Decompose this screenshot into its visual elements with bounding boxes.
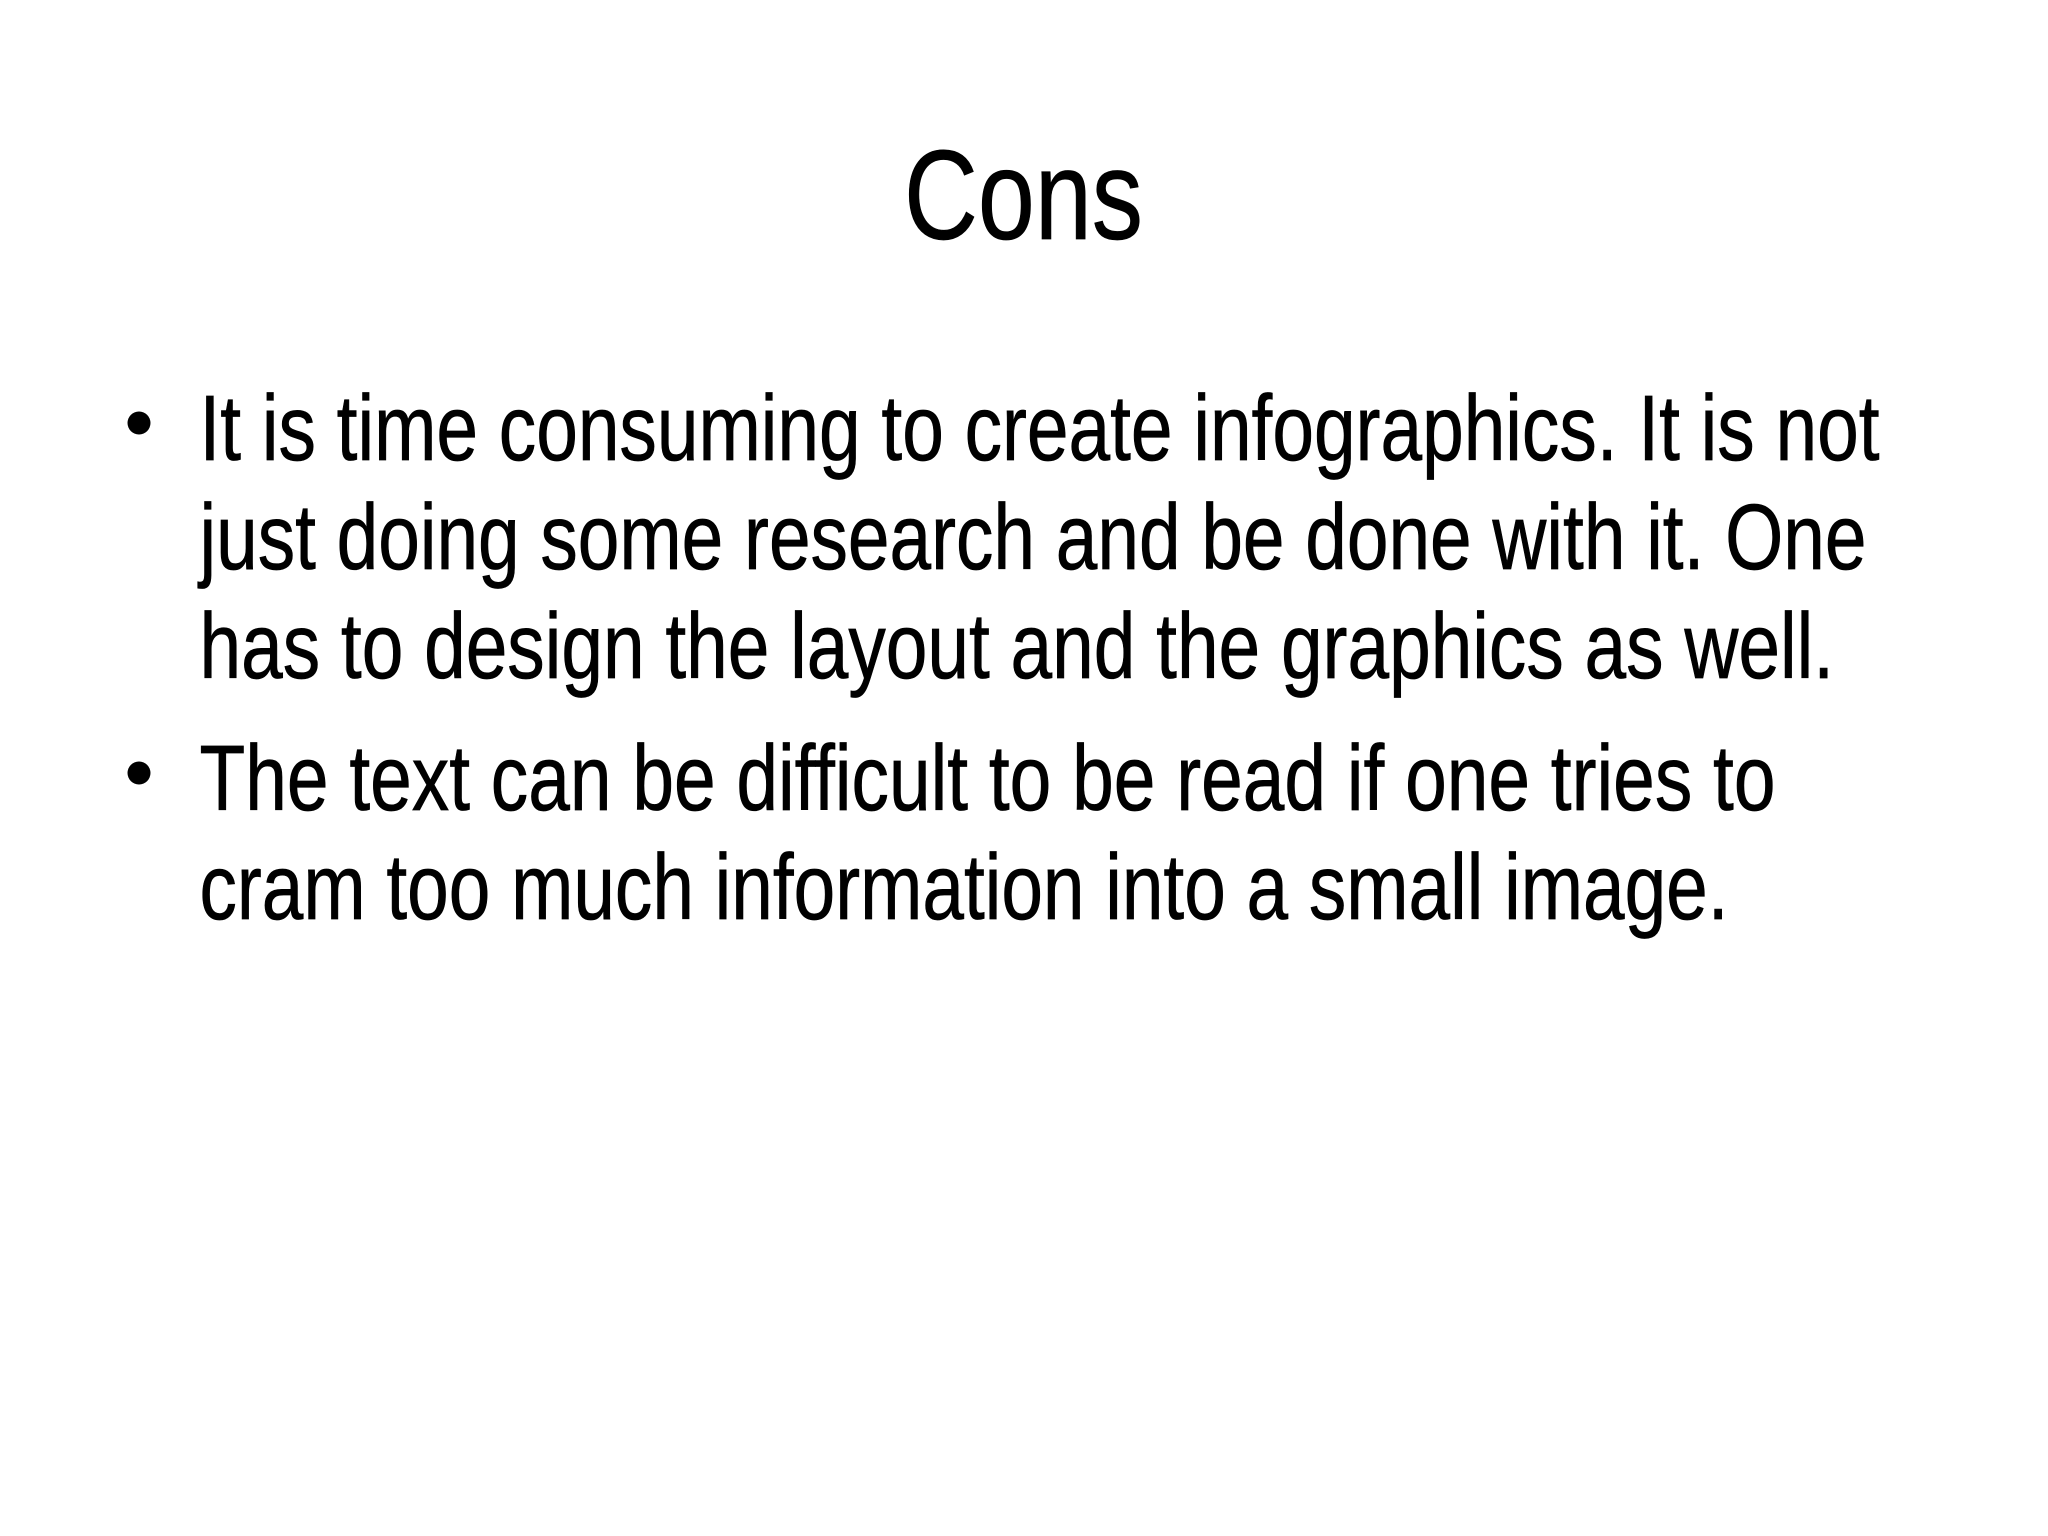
text block: second bullet text: cram too much information into a small image. — [200, 835, 1728, 939]
bullet point: time consuming — [128, 376, 1880, 698]
text block: first bullet text — [197, 376, 1880, 698]
title: Cons — [904, 124, 1143, 266]
icon: bullet marker — [128, 412, 150, 434]
bullet point: difficult to read — [128, 726, 1776, 939]
text block: second bullet text — [200, 726, 1776, 939]
icon: bullet marker — [128, 762, 150, 784]
